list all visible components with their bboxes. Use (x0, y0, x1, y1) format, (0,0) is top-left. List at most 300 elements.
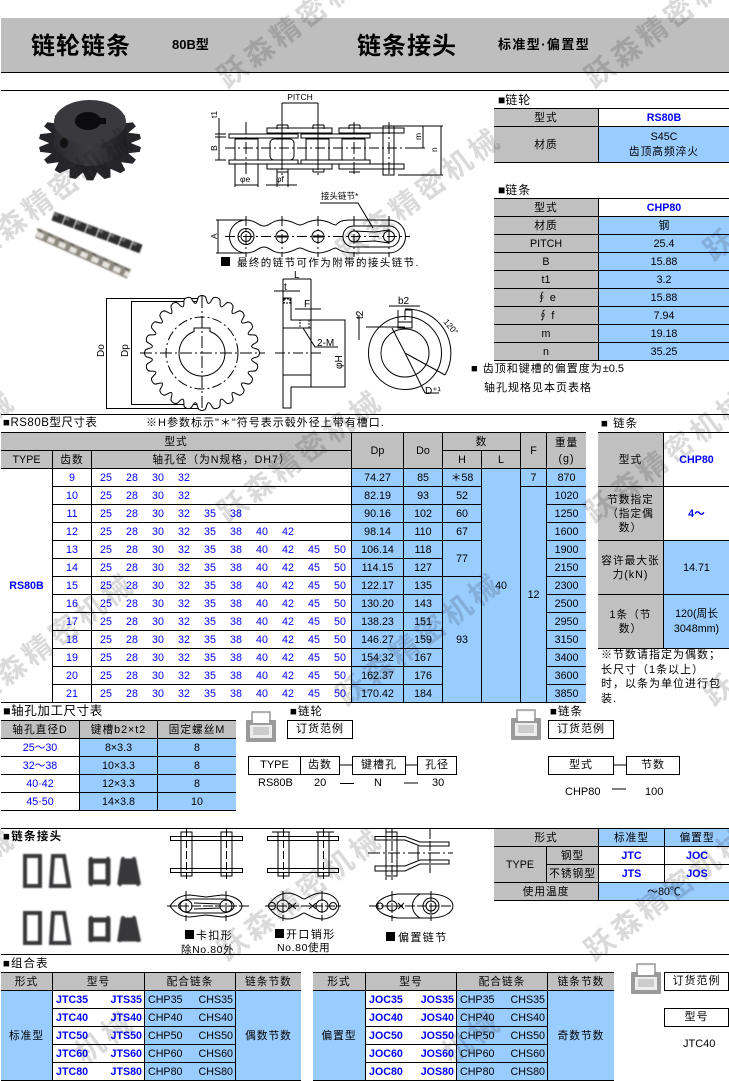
table: RS80B dimensions: 45 (308, 562, 320, 574)
diagram: sprocket side view: 2-M (317, 338, 334, 349)
table: RS80B dimensions: 40 (256, 634, 268, 646)
table: bore machining: 键槽b2×t2 (91, 724, 146, 736)
table: RS80B dimensions: 162.37 (361, 670, 394, 682)
table: bore machining: 10 (191, 796, 203, 808)
table: combination, standard: JTC80 (56, 1066, 88, 1078)
table: RS80B dimensions: 38 (230, 688, 242, 700)
table: connector types: TYPE (506, 858, 534, 870)
table: RS80B dimensions: 42 (282, 526, 294, 538)
table: combination, offset: JOS40 (421, 1012, 454, 1024)
table: RS80B dimensions: 38 (230, 544, 242, 556)
table: RS80B dimensions: 42 (282, 688, 294, 700)
photos: connector links (25, 856, 138, 943)
table: combination, offset: JOS80 (421, 1066, 454, 1078)
data rows: 32 (178, 472, 190, 484)
table: RS80B dimensions: F (530, 444, 537, 456)
table: RS80B dimensions: 14 (66, 562, 78, 574)
table: RS80B dimensions: 25 (100, 580, 112, 592)
table: chain specs: ∮ f (538, 310, 554, 322)
table: RS80B dimensions: 1020 (555, 490, 578, 502)
table: RS80B dimensions: RS80B (9, 580, 44, 592)
table: RS80B dimensions: 3850 (555, 688, 578, 700)
example values: RS80B (258, 777, 293, 789)
diagram: cotter pin link (265, 829, 341, 954)
table: chain data: 3048mm) (674, 622, 719, 634)
diagram: sprocket keyway view (355, 296, 460, 397)
table: RS80B dimensions: 30 (152, 598, 164, 610)
table: connector types: JTC (621, 850, 642, 862)
box: keyway bore: 键槽孔 (361, 759, 397, 771)
diagram: sprocket side view: F (304, 299, 310, 310)
caption: clip type (181, 928, 234, 956)
table: combination, offset: CHS80 (511, 1066, 545, 1078)
caption: clip type: 卡扣形 (196, 928, 233, 942)
header band (1, 18, 729, 73)
data rows: 28 (126, 472, 138, 484)
table: RS80B dimensions: H (458, 454, 466, 466)
table: chain specs: ∮ e (536, 292, 556, 304)
table: RS80B dimensions: 122.17 (361, 580, 394, 592)
table: RS80B dimensions: 30 (152, 544, 164, 556)
table: connector types: 不锈钢型 (549, 868, 596, 880)
table: RS80B dimensions: L (498, 454, 504, 466)
table: RS80B dimensions: 45 (308, 598, 320, 610)
table: combination, standard: 形式 (15, 976, 38, 988)
table: RS80B dimensions: 93 (417, 490, 429, 502)
table: RS80B dimensions: 35 (204, 616, 216, 628)
table: RS80B dimensions: 40 (256, 562, 268, 574)
table: RS80B dimensions: 30 (152, 652, 164, 664)
table: RS80B dimensions: 38 (230, 652, 242, 664)
table: combination, offset: JOC50 (369, 1030, 403, 1042)
table: bore machining: 25～30 (23, 742, 57, 754)
caption: cotter pin type (275, 927, 336, 954)
table: RS80B dimensions: 50 (334, 580, 346, 592)
table: combination, standard: CHP35 (148, 994, 182, 1006)
table: chain data: 4～ (688, 508, 705, 520)
watermark: 机械 (69, 1005, 142, 1071)
table: RS80B dimensions: 146.27 (361, 634, 394, 646)
table: chain specs: t1 (542, 274, 550, 286)
table: chain data: 1条（节 (609, 608, 652, 620)
table: RS80B dimensions: 45 (308, 580, 320, 592)
table: combination, offset: JOS50 (421, 1030, 454, 1042)
box: bore (417, 756, 457, 775)
table: RS80B dimensions: 28 (126, 580, 138, 592)
table: chain specs: 15.88 (651, 256, 677, 268)
table: RS80B dimensions: 40 (256, 544, 268, 556)
table: combination, standard: CHS80 (199, 1066, 233, 1078)
data rows: 25 (100, 472, 112, 484)
table: RS80B dimensions: 32 (178, 544, 190, 556)
table: RS80B dimensions: 38 (230, 616, 242, 628)
button: order example connector (664, 972, 729, 991)
table: combination, offset: CHP50 (460, 1030, 494, 1042)
table: RS80B dimensions: 50 (334, 670, 346, 682)
table: combination, standard: CHS35 (199, 994, 233, 1006)
table: chain data: 120(周长 (675, 608, 718, 620)
table: connector types: JOS (686, 868, 708, 880)
table: RS80B dimensions: 143 (414, 598, 432, 610)
table: RS80B dimensions: 25 (100, 616, 112, 628)
table: sprocket specs: 型式 (534, 112, 558, 124)
table: combination, standard: CHP40 (148, 1012, 182, 1024)
table: RS80B dimensions: 30 (152, 562, 164, 574)
table: RS80B dimensions: 40 (256, 616, 268, 628)
table: RS80B dimensions: 38 (230, 580, 242, 592)
table: RS80B dimensions: 167 (414, 652, 432, 664)
table: RS80B dimensions: 轴孔径（为N规格，DH7） (152, 454, 291, 466)
data rows: ＊58 (451, 472, 473, 484)
table: RS80B dimensions: 1900 (555, 544, 578, 556)
table: bore machining (1, 720, 236, 811)
table: combination, standard: JTC60 (56, 1048, 88, 1060)
table: bore machining: 8 (194, 742, 200, 754)
note: bore spec: 轴孔规格见本页表格 (484, 382, 592, 394)
heading: sprocket order: ■链轮 (290, 706, 323, 718)
table: combination, standard: 配合链条 (167, 976, 213, 988)
table: RS80B dimensions: 25 (100, 490, 112, 502)
box: type: TYPE (260, 759, 289, 771)
table: RS80B dimensions: 30 (152, 508, 164, 520)
data rows: 7 (531, 472, 536, 484)
data rows: 870 (558, 472, 575, 484)
table: bore machining: 14×3.8 (102, 796, 135, 808)
table: RS80B dimensions: 52 (456, 490, 468, 502)
box: model number (664, 1008, 729, 1027)
table: RS80B dimensions: 12 (528, 588, 539, 600)
heading: chain order: ■链条 (550, 706, 583, 718)
table: RS80B dimensions: 25 (100, 508, 112, 520)
table: RS80B dimensions: 60 (456, 508, 468, 520)
table: RS80B dimensions: 35 (204, 598, 216, 610)
table: RS80B dimensions: 50 (334, 634, 346, 646)
table: RS80B dimensions: 77 (456, 552, 468, 564)
table: RS80B dimensions: 118 (414, 544, 432, 556)
table: RS80B dimensions: 19 (66, 652, 78, 664)
table: RS80B dimensions: 35 (204, 562, 216, 574)
note: even link counts: 装. (601, 693, 617, 705)
table: combination, standard: 标准型 (9, 1030, 44, 1042)
table: connector types: 偏置型 (679, 832, 715, 844)
table: RS80B dimensions: 3400 (555, 652, 578, 664)
heading: combination table: ■组合表 (3, 958, 48, 970)
heading: chain table: ■ 链条 (601, 418, 638, 430)
icon: printer, chain order (511, 710, 541, 740)
title: sprocket chain: 链轮链条 (31, 33, 131, 60)
table: RS80B dimensions: Do (416, 444, 430, 456)
heading: sprocket specs: ■链轮 (498, 93, 531, 107)
table: chain data: CHP80 (679, 454, 714, 466)
dimension labels: φf (276, 174, 285, 184)
table: RS80B dimensions: 40 (256, 670, 268, 682)
table: RS80B dimensions: 38 (230, 526, 242, 538)
button: order example chain: 订货范例 (557, 723, 605, 735)
button: order example chain (548, 720, 614, 739)
table: RS80B dimensions: 28 (126, 598, 138, 610)
table: connector types: JTS (622, 868, 641, 880)
table: RS80B dimensions: 40 (256, 580, 268, 592)
note: tooth offset: ■ 齿顶和键槽的偏置度为±0.5 (471, 363, 624, 375)
table: RS80B dimensions: 35 (204, 544, 216, 556)
table: combination, standard: CHS50 (199, 1030, 233, 1042)
heading: chain specs: ■链条 (498, 183, 531, 197)
table: connector types (494, 828, 729, 901)
table: combination, offset: 奇数节数 (558, 1030, 604, 1042)
note: H parameter: ※H参数标示"＊"符号表示毂外径上带有槽口. (146, 417, 385, 429)
table: connector types: 使用温度 (523, 886, 569, 898)
table: RS80B dimensions: 32 (178, 490, 190, 502)
dimension labels: φe (240, 174, 251, 184)
table: combination, offset: CHP35 (460, 994, 494, 1006)
table: RS80B dimensions: 50 (334, 688, 346, 700)
table: RS80B dimensions: 25 (100, 526, 112, 538)
table: RS80B dimensions: 齿数 (60, 454, 84, 466)
example value: JTC40: JTC40 (683, 1038, 715, 1050)
table: RS80B dimensions: 20 (66, 670, 78, 682)
box: model number: 型号 (684, 1011, 708, 1023)
table: bore machining: 8 (194, 760, 200, 772)
icon: printer, sprocket order (246, 712, 276, 742)
button: order example connector: 订货范例 (672, 975, 720, 987)
diagram: sprocket keyway view: 120° (441, 317, 460, 337)
table: chain specs: 15.88 (651, 292, 677, 304)
table: chain specs: n (543, 346, 549, 358)
table: RS80B dimensions: 67 (456, 526, 468, 538)
table: RS80B dimensions: 32 (178, 652, 190, 664)
table: combination, offset: JOS35 (421, 994, 454, 1006)
table: RS80B dimensions: 28 (126, 670, 138, 682)
table: chain data: 型式 (619, 454, 642, 466)
table: RS80B dimensions: 106.14 (361, 544, 394, 556)
diagram: sprocket side view: t (284, 282, 287, 293)
table: bore machining: 12×3.3 (102, 778, 135, 790)
table: chain specs: 型式 (534, 202, 558, 214)
caption: cotter pin type: 开口销形 (286, 927, 336, 941)
table: connector types: 标准型 (614, 832, 649, 844)
table: combination, standard: JTS50 (110, 1030, 142, 1042)
table: combination, standard: CHP60 (148, 1048, 182, 1060)
table: combination, standard: CHP50 (148, 1030, 182, 1042)
table: RS80B dimensions: 50 (334, 562, 346, 574)
diagram: chain top view (209, 92, 443, 187)
subtitle: standard and offset: 标准型·偏置型 (498, 37, 590, 52)
diagram: sprocket side view: φH (334, 355, 345, 369)
table: RS80B dimensions: 159 (414, 634, 432, 646)
table: combination, offset: 链条节数 (558, 976, 604, 988)
table: RS80B dimensions: 138.23 (361, 616, 394, 628)
table: RS80B dimensions: 38 (230, 634, 242, 646)
table: RS80B dimensions: 28 (126, 562, 138, 574)
table: combination, standard: CHP80 (148, 1066, 182, 1078)
table: RS80B dimensions: 127 (414, 562, 432, 574)
table: RS80B dimensions: 45 (308, 652, 320, 664)
table: bore machining: 40·42 (26, 778, 54, 790)
table: RS80B dimensions: 32 (178, 688, 190, 700)
watermark: 跃森精密机械 (212, 822, 390, 967)
diagram: clip type link (167, 829, 249, 956)
table: RS80B dimensions: 32 (178, 508, 190, 520)
table: RS80B dimensions: 30 (152, 688, 164, 700)
table: combination, standard (1, 972, 301, 1081)
table: RS80B dimensions: 32 (178, 670, 190, 682)
table: RS80B dimensions: 32 (178, 616, 190, 628)
data rows (1, 469, 586, 703)
table: bore machining: 32～38 (23, 760, 57, 772)
table: RS80B dimensions: 90.16 (364, 508, 391, 520)
table: combination, offset: 形式 (327, 976, 351, 988)
table: RS80B dimensions: 重量 (555, 436, 578, 448)
table: combination, standard: JTC35 (56, 994, 88, 1006)
table: RS80B dimensions: 40 (256, 688, 268, 700)
diagram: chain side view (209, 191, 410, 257)
heading: chain connector: ■链条接头 (3, 831, 62, 843)
callout: connecting link: 接头链节* (321, 191, 359, 201)
table: RS80B dimensions: 30 (152, 580, 164, 592)
table: RS80B dimensions: 38 (230, 598, 242, 610)
table: chain data: 数） (619, 522, 642, 534)
button: order example sprocket: 订货范例 (296, 723, 344, 735)
table: RS80B dimensions: 38 (230, 562, 242, 574)
dimension labels: t1 (209, 111, 219, 118)
table: RS80B dimensions: 35 (204, 670, 216, 682)
table: combination, offset (313, 972, 614, 1081)
table: RS80B dimensions: 25 (100, 598, 112, 610)
table: RS80B dimensions: 170.42 (361, 688, 394, 700)
table: RS80B dimensions: 35 (204, 580, 216, 592)
table: RS80B dimensions: 30 (152, 490, 164, 502)
table: combination, standard: 偶数节数 (245, 1030, 292, 1042)
box: form: 型式 (569, 759, 593, 771)
table: RS80B dimensions: 35 (204, 688, 216, 700)
table: RS80B dimensions: 50 (334, 652, 346, 664)
table: RS80B dimensions: 135 (414, 580, 432, 592)
table: RS80B dimensions: 154.32 (361, 652, 394, 664)
table: combination, standard: 链条节数 (245, 976, 292, 988)
table: RS80B dimensions: 28 (126, 490, 138, 502)
example values: CHP80 (565, 786, 600, 798)
subtitle: 80B: 80B型 (172, 37, 209, 52)
title: chain connector: 链条接头 (357, 33, 457, 60)
table: combination, offset: CHP40 (460, 1012, 494, 1024)
heading: bore machining table: ■轴孔加工尺寸表 (3, 704, 103, 718)
table: combination, standard: JTC40 (56, 1012, 88, 1024)
box: tooth count: 齿数 (308, 759, 332, 771)
table: sprocket specs: RS80B (647, 112, 681, 124)
table: chain specs: 7.94 (654, 310, 674, 322)
table: combination, standard: CHS60 (199, 1048, 233, 1060)
table: connector types: JOC (686, 850, 708, 862)
table: RS80B dimensions: 28 (126, 544, 138, 556)
note: even link counts: 长尺寸（1条以上） (601, 664, 704, 676)
table: RS80B dimensions: 25 (100, 562, 112, 574)
table: RS80B dimensions: 32 (178, 598, 190, 610)
table: sprocket specs: 材质 (534, 138, 558, 150)
table: RS80B dimensions: 45 (308, 544, 320, 556)
table: RS80B dimensions: 35 (204, 508, 216, 520)
table: RS80B dimensions: 28 (126, 688, 138, 700)
table: RS80B dimensions: 151 (414, 616, 432, 628)
table: bore machining: 45·50 (26, 796, 54, 808)
table: RS80B dimensions: 130.20 (361, 598, 394, 610)
diagram: offset link (368, 829, 453, 944)
table: RS80B dimensions: 12 (66, 526, 78, 538)
table: connector types: 形式 (534, 832, 558, 844)
data rows: 9 (69, 472, 75, 484)
table: RS80B dimensions: 25 (100, 670, 112, 682)
table: RS80B dimensions: 型式 (164, 436, 188, 448)
table: RS80B dimensions: 2300 (555, 580, 578, 592)
diagram: chain side view: A (209, 233, 219, 239)
table: RS80B dimensions: 28 (126, 508, 138, 520)
watermark: 机械 (436, 1005, 509, 1071)
dimension labels (209, 111, 439, 184)
table: RS80B dimensions (1, 432, 586, 703)
table: RS80B dimensions: 40 (256, 526, 268, 538)
table: RS80B dimensions: 42 (282, 598, 294, 610)
table: combination, standard: 型号 (87, 976, 110, 988)
table: combination, offset: CHS50 (511, 1030, 545, 1042)
table: RS80B dimensions: 10 (66, 490, 78, 502)
order code boxes: sprocket: 20 (314, 777, 326, 789)
table: combination, standard: CHS40 (199, 1012, 233, 1024)
table: RS80B dimensions: 数 (476, 436, 487, 448)
diagram: sprocket front view: Dp (120, 344, 131, 357)
table: chain specs: m (542, 328, 550, 340)
table: RS80B dimensions: 35 (204, 652, 216, 664)
table: RS80B dimensions: 40 (495, 580, 507, 592)
photo: sprocket (38, 100, 142, 180)
table: RS80B dimensions: 38 (230, 508, 242, 520)
table: RS80B dimensions: 32 (178, 580, 190, 592)
table: RS80B dimensions: 93 (456, 634, 468, 646)
table: RS80B dimensions: 28 (126, 616, 138, 628)
dimension labels: B (209, 145, 219, 151)
table: RS80B dimensions: 1600 (555, 526, 578, 538)
table: sprocket specs (494, 108, 729, 163)
table: combination, standard: JTS80 (110, 1066, 142, 1078)
table: RS80B dimensions: 16 (66, 598, 78, 610)
table: RS80B dimensions: 17 (66, 616, 78, 628)
table: RS80B dimensions: 18 (66, 634, 78, 646)
table: combination, standard: JTC50 (56, 1030, 88, 1042)
table: RS80B dimensions: 38 (230, 670, 242, 682)
table: combination, offset: JOC80 (369, 1066, 403, 1078)
table: RS80B dimensions: 50 (334, 544, 346, 556)
table: combination, standard: JTS35 (110, 994, 142, 1006)
table: RS80B dimensions: 28 (126, 652, 138, 664)
table: RS80B dimensions: 35 (204, 526, 216, 538)
table: combination, offset: JOC35 (369, 994, 403, 1006)
table: RS80B dimensions: 82.19 (364, 490, 391, 502)
table: chain specs: PITCH (530, 238, 562, 250)
table: chain specs: 材质 (534, 220, 558, 232)
table: RS80B dimensions: 42 (282, 616, 294, 628)
table: RS80B dimensions: 42 (282, 670, 294, 682)
table: combination, standard: JTS40 (110, 1012, 142, 1024)
table: RS80B dimensions: 2950 (555, 616, 578, 628)
icon: printer, connector order (631, 964, 661, 994)
table: RS80B dimensions: 42 (282, 652, 294, 664)
table: connector types: ～80℃ (647, 886, 681, 898)
table: RS80B dimensions: 176 (414, 670, 432, 682)
table: chain specs: 35.25 (651, 346, 677, 358)
table: combination, offset: JOC40 (369, 1012, 403, 1024)
table: combination, standard: JTS60 (110, 1048, 142, 1060)
table: connector types: 钢型 (561, 850, 584, 862)
table: RS80B dimensions: 50 (334, 616, 346, 628)
note: last link: 最终的链节可作为附带的接头链节. (237, 256, 420, 269)
